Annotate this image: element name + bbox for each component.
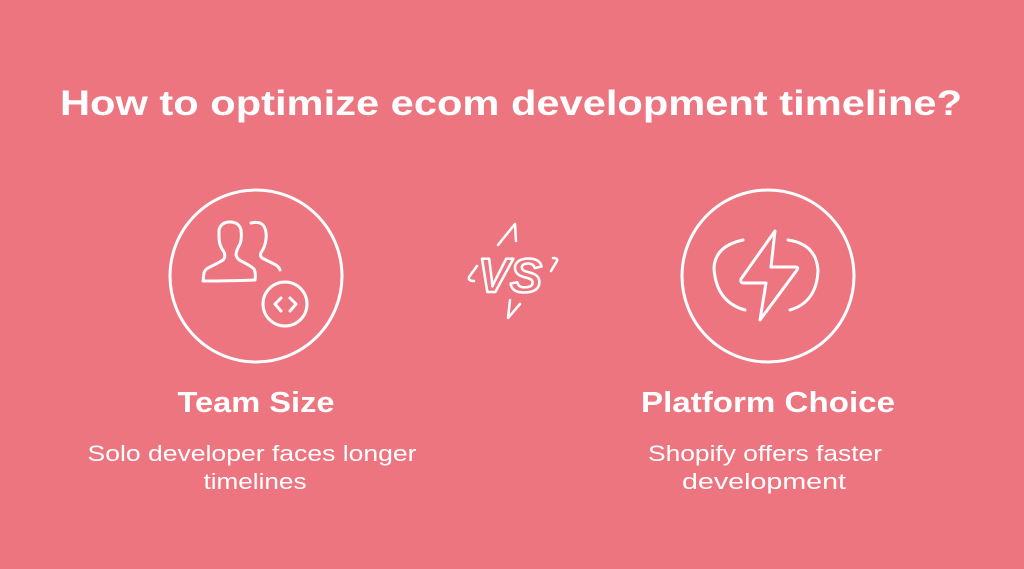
icon: platform circle [682, 190, 854, 362]
text: development [682, 469, 846, 494]
text: team size description: Solo developer faces longer [88, 441, 416, 466]
heading: Team Size: Team Size [178, 387, 334, 419]
title: How to optimize ecom development timeline? [60, 84, 962, 123]
text: platform description: Shopify offers faster [648, 441, 882, 466]
icon: team size circle [170, 190, 342, 362]
icon: VS [469, 224, 557, 318]
text: timelines [204, 469, 306, 494]
heading: Platform Choice: Platform Choice [641, 387, 895, 419]
icon: VS: VS [478, 250, 542, 303]
